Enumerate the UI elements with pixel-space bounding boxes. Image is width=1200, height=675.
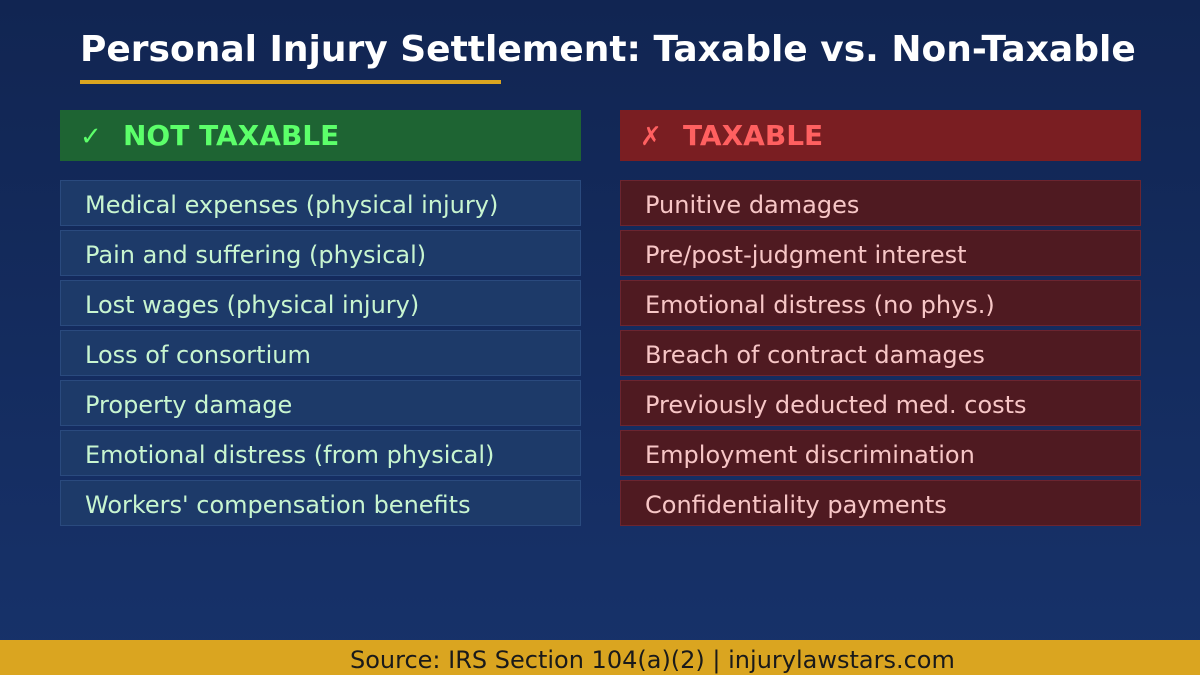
item: Pre/post-judgment interest — [645, 241, 967, 269]
header: taxable: TAXABLE — [683, 119, 823, 152]
item — [620, 380, 1141, 426]
item: Emotional distress (from physical) — [85, 441, 494, 469]
title: Personal Injury Settlement: Taxable vs. Non-Taxable — [80, 29, 1136, 70]
header: not taxable: NOT TAXABLE — [123, 119, 339, 152]
footer source: Source: IRS Section 104(a)(2) | injurylawstars.com — [350, 646, 955, 674]
item: Workers' compensation benefits — [85, 491, 471, 519]
item: Breach of contract damages — [645, 341, 985, 369]
item — [60, 330, 581, 376]
item: Pain and suffering (physical) — [85, 241, 426, 269]
item — [620, 180, 1141, 226]
item — [60, 280, 581, 326]
item — [620, 430, 1141, 476]
header: taxable — [620, 110, 1141, 161]
item: Previously deducted med. costs — [645, 391, 1027, 419]
item: Lost wages (physical injury) — [85, 291, 419, 319]
footer source — [0, 640, 1200, 675]
item — [60, 380, 581, 426]
header: not taxable: ✓ — [80, 122, 102, 152]
header: not taxable — [60, 110, 581, 161]
item: Emotional distress (no phys.) — [645, 291, 995, 319]
item — [60, 430, 581, 476]
item: Employment discrimination — [645, 441, 975, 469]
item — [620, 230, 1141, 276]
panel: not taxable — [60, 110, 581, 526]
item — [60, 230, 581, 276]
item: Medical expenses (physical injury) — [85, 191, 498, 219]
panel: taxable — [620, 110, 1141, 526]
header: taxable: ✗ — [640, 122, 662, 152]
item — [60, 480, 581, 526]
item: Property damage — [85, 391, 292, 419]
item — [620, 330, 1141, 376]
item: Confidentiality payments — [645, 491, 947, 519]
item: Loss of consortium — [85, 341, 311, 369]
item — [620, 280, 1141, 326]
item: Punitive damages — [645, 191, 859, 219]
item — [620, 480, 1141, 526]
item — [60, 180, 581, 226]
